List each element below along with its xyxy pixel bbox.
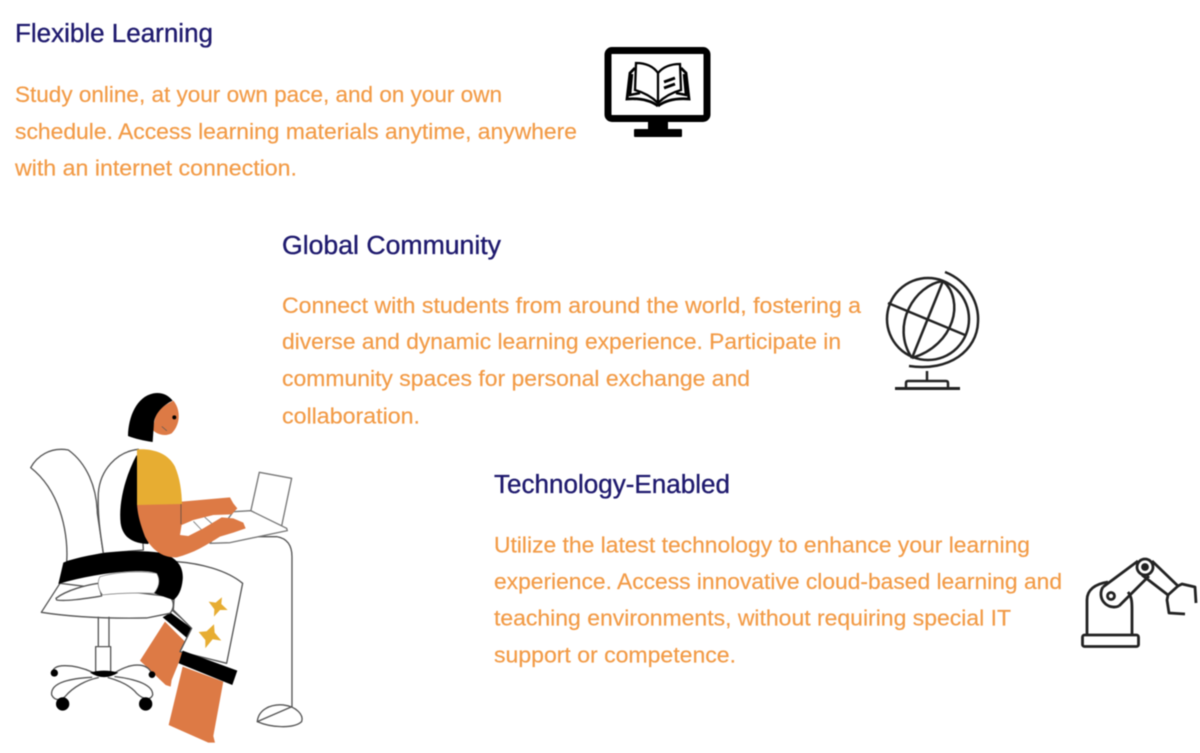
torso: dark back [120, 455, 157, 544]
heading: technology-enabled: Technology-Enabled [494, 471, 730, 499]
text block: flexible learning description: Study online, at your own pace, and on your own [15, 82, 502, 107]
text block: technology-enabled description: teaching environments, without requiring special IT [494, 606, 1011, 630]
near shin [169, 667, 223, 743]
text block: technology-enabled description [494, 532, 1062, 668]
text block: global community description: collaboration. [282, 404, 420, 428]
text block: flexible learning description [14, 82, 577, 180]
gap between forearms with keyboard lines [180, 513, 223, 537]
text block: technology-enabled description: experience. Access innovative cloud-based learning and [494, 569, 1062, 594]
illustration: person working on laptop in office chair [31, 393, 302, 743]
chair seat [41, 583, 173, 618]
icon: globe on stand [887, 272, 978, 388]
panel: flexible learning [14, 20, 707, 180]
icon: robotic arm [1082, 559, 1196, 646]
text block: technology-enabled description: support or competence. [494, 642, 736, 668]
text block: global community description: Connect with students from around the world, fostering a [282, 293, 861, 318]
laptop [210, 472, 292, 543]
icon: monitor with open book [608, 50, 707, 137]
desk lamp stand [257, 537, 302, 727]
heading: global community: Global Community [282, 232, 501, 260]
text block: technology-enabled description: Utilize the latest technology to enhance your learning [494, 532, 1030, 558]
text block: global community description [282, 293, 861, 428]
far leg [140, 622, 187, 687]
heading: flexible learning: Flexible Learning [15, 20, 213, 48]
torso and forearms [137, 497, 246, 557]
black belt / thigh band [58, 551, 183, 600]
stars [199, 597, 228, 648]
head [128, 393, 179, 442]
trousers near leg [173, 562, 243, 663]
shirt [137, 449, 182, 505]
panel: technology-enabled [494, 471, 1196, 668]
panel: global community [282, 232, 978, 428]
text block: global community description: diverse and dynamic learning experience. Participate in [282, 329, 841, 354]
text block: flexible learning description: with an internet connection. [14, 156, 297, 180]
text block: flexible learning description: schedule. Access learning materials anytime, anywhere [15, 119, 577, 144]
chair post and base [52, 617, 153, 700]
chair back [31, 449, 143, 562]
text block: global community description: community spaces for personal exchange and [282, 366, 750, 391]
